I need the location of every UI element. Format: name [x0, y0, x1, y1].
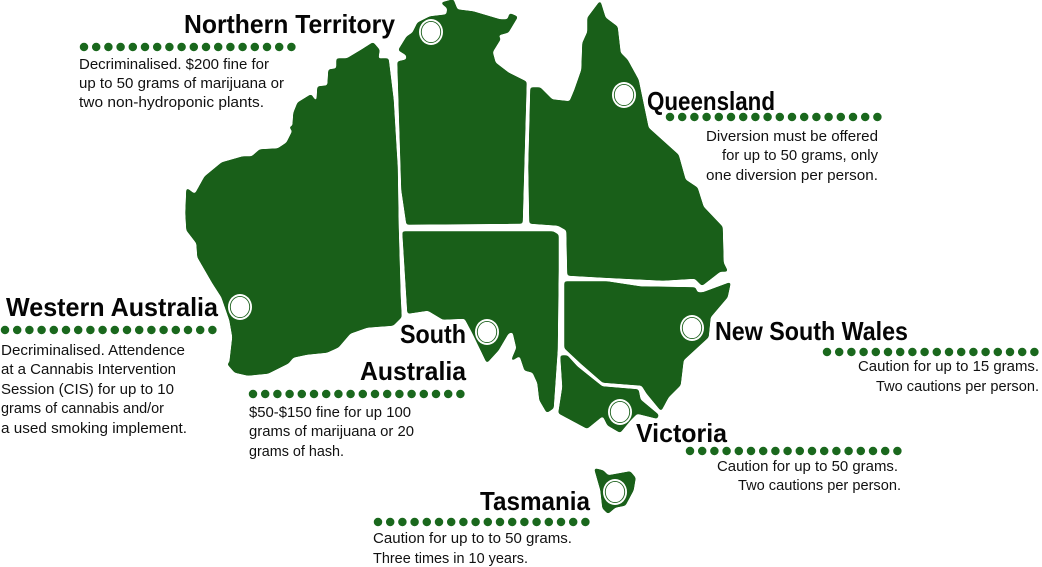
marker: Western Australia: [228, 294, 252, 320]
text: Tasmania law: Three times in 10 years.: [373, 550, 528, 567]
text: Northern Territory law: up to 50 grams of marijuana or: [79, 75, 284, 92]
text: South Australia law: grams of hash.: [249, 443, 344, 460]
text: Western Australia law: a used smoking implement.: [1, 420, 187, 437]
dotted rule: [670, 113, 879, 121]
panel: Western Australia: [1, 292, 219, 437]
marker: South Australia: [475, 319, 499, 345]
region: Northern Territory: [398, 0, 526, 224]
heading: South Australia: [360, 319, 467, 386]
heading: Tasmania: Tasmania: [480, 486, 591, 516]
text: Victoria law: [717, 458, 901, 494]
text: Western Australia law: Decriminalised. Attendence: [1, 342, 185, 359]
text: Victoria law: Caution for up to 50 grams.: [717, 458, 898, 475]
text: Queensland law: Diversion must be offered: [706, 128, 878, 145]
dotted rule: [827, 348, 1037, 356]
dotted rule: [378, 518, 587, 526]
text: South Australia law: grams of marijuana or 20: [249, 423, 414, 440]
dotted rule: [690, 447, 899, 455]
text: New South Wales law: Two cautions per person.: [876, 378, 1039, 395]
dotted rule: [253, 390, 462, 398]
text: Western Australia law: grams of cannabis and/or: [1, 400, 164, 417]
region: Queensland: [529, 2, 727, 285]
region: Victoria: [559, 356, 658, 432]
panel: Victoria: [636, 418, 901, 494]
text: Queensland law: one diversion per person.: [706, 167, 878, 184]
text: South Australia law: [249, 404, 414, 460]
text: Northern Territory law: [79, 56, 284, 111]
panel: Queensland: [647, 86, 879, 184]
marker: Victoria: [608, 399, 632, 425]
heading: New South Wales: New South Wales: [715, 316, 908, 346]
text: South Australia law: $50-$150 fine for up 100: [249, 404, 411, 421]
text: Queensland law: for up to 50 grams, only: [722, 147, 878, 164]
text: Western Australia law: at a Cannabis Intervention: [1, 361, 176, 378]
text: Tasmania law: [373, 530, 572, 567]
text: New South Wales law: Caution for up to 15 grams.: [858, 358, 1039, 375]
dotted rule: [5, 326, 213, 334]
region: Western Australia: [186, 43, 401, 375]
text: Northern Territory law: two non-hydroponic plants.: [79, 94, 264, 111]
heading: South Australia: Australia: [360, 356, 467, 386]
text: Western Australia law: Session (CIS) for up to 10: [1, 381, 174, 398]
text: Queensland law: [706, 128, 878, 184]
region: South Australia: [403, 232, 558, 412]
text: Northern Territory law: Decriminalised. $200 fine for: [79, 56, 269, 73]
text: Tasmania law: Caution for up to to 50 grams.: [373, 530, 572, 547]
heading: Victoria: Victoria: [636, 418, 728, 448]
marker: Queensland: [612, 82, 636, 108]
marker: New South Wales: [680, 315, 704, 341]
panel: New South Wales: [715, 316, 1039, 395]
heading: Western Australia: Western Australia: [6, 292, 219, 322]
region: New South Wales: [565, 282, 730, 410]
text: Western Australia law: [1, 342, 187, 437]
panel: Tasmania: [373, 486, 591, 567]
heading: South Australia: South: [400, 319, 466, 349]
panel: Northern Territory: [79, 9, 396, 111]
marker: Tasmania: [603, 479, 627, 505]
region: Tasmania: [595, 469, 635, 513]
heading: Northern Territory: Northern Territory: [184, 9, 396, 39]
heading: Queensland: Queensland: [647, 86, 775, 116]
text: New South Wales law: [858, 358, 1039, 395]
marker: Northern Territory: [419, 19, 443, 45]
map of Australia: [186, 0, 730, 513]
text: Victoria law: Two cautions per person.: [738, 477, 901, 494]
dotted rule: [84, 43, 297, 51]
panel: South Australia: [249, 319, 467, 460]
